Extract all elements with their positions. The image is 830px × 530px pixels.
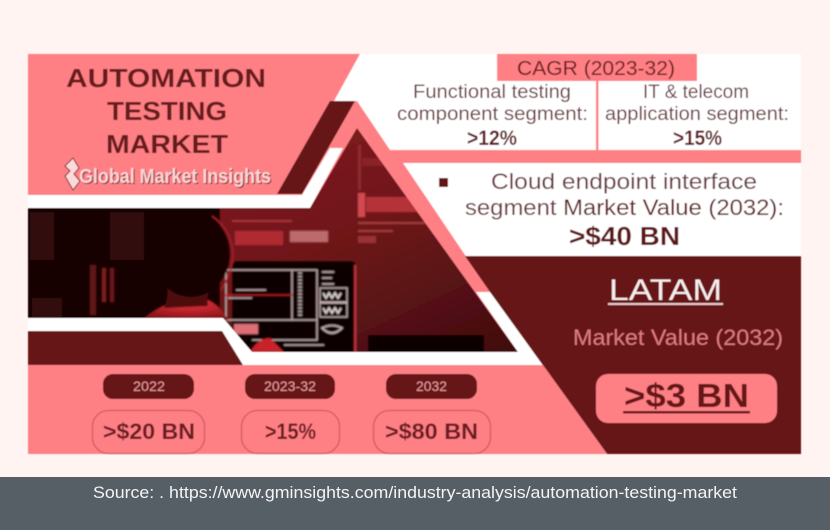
second monitor xyxy=(368,335,484,355)
value outline 2022 xyxy=(92,410,204,454)
logo: Global Market Insights xyxy=(65,158,272,190)
person: right arm xyxy=(250,338,284,352)
year pill 2022 xyxy=(103,374,194,399)
person: headset rim xyxy=(212,216,233,290)
LATAM value: >$3 BN xyxy=(624,377,749,414)
panel: white base xyxy=(28,54,801,454)
value 2023-32: >15% xyxy=(265,419,316,444)
stat: 2032 xyxy=(374,374,490,454)
logo icon xyxy=(65,158,80,190)
heading: title xyxy=(66,63,266,159)
LATAM value box xyxy=(596,374,777,423)
monitor xyxy=(232,261,356,356)
year text 2023-32: 2023-32 xyxy=(264,378,316,394)
CAGR label background xyxy=(497,54,697,81)
title line 2: TESTING xyxy=(107,96,227,126)
title line 3: MARKET xyxy=(106,129,228,159)
market value label: Market Value (2032) xyxy=(573,325,783,350)
year pill 2032 xyxy=(386,374,477,399)
source text: Source: . https://www.gminsights.com/industry-analysis/automation-testing-market xyxy=(93,483,737,502)
LATAM underline xyxy=(608,303,723,305)
value outline 2023-32 xyxy=(242,410,340,454)
divider xyxy=(596,81,598,150)
LATAM value underline xyxy=(623,411,750,414)
component segment text: component segment: xyxy=(397,104,588,125)
year text 2032: 2032 xyxy=(416,378,447,394)
panel: salmon statistics strip xyxy=(28,365,607,454)
application segment text: application segment: xyxy=(605,104,789,125)
panel: cloud endpoint xyxy=(439,169,784,251)
logo text: Global Market Insights xyxy=(79,166,271,188)
dark diagonal stripe xyxy=(277,101,355,194)
photo: developer at monitor xyxy=(20,125,523,356)
dark band: lower left xyxy=(28,331,243,365)
person: shoulders xyxy=(142,299,228,320)
bullet xyxy=(439,178,448,187)
lower screen red block xyxy=(234,324,258,334)
monitor screen lines xyxy=(225,270,347,345)
white stripe: lower xyxy=(28,292,543,365)
infographic artwork xyxy=(20,54,801,454)
value 2022: >$20 BN xyxy=(103,419,195,444)
person: neck xyxy=(164,288,210,309)
cloud text line 1: Cloud endpoint interface xyxy=(491,169,757,194)
LATAM heading: LATAM xyxy=(609,274,722,307)
cloud value: >$40 BN xyxy=(569,221,680,251)
logo text shadow: Global Market Insights xyxy=(80,167,272,189)
panel: CAGR xyxy=(397,54,789,150)
dark room xyxy=(27,208,221,318)
year text 2022: 2022 xyxy=(133,378,165,394)
functional value: >12% xyxy=(467,127,517,150)
title line 1: AUTOMATION xyxy=(66,63,266,93)
stat: 2022 xyxy=(92,374,204,454)
panel: salmon title block and diagonal band xyxy=(28,54,801,352)
photo contents xyxy=(20,125,523,356)
CAGR label: CAGR (2023-32) xyxy=(517,58,675,80)
IT and telecom text: IT & telecom xyxy=(643,82,749,103)
value 2032: >$80 BN xyxy=(385,419,478,444)
stat: 2023-32 xyxy=(242,374,340,454)
panel: LATAM xyxy=(573,274,783,423)
year pill 2023-32 xyxy=(245,374,335,399)
source bar background xyxy=(0,477,830,530)
cloud text line 2: segment Market Value (2032): xyxy=(465,195,784,220)
red code band on the wall xyxy=(232,145,428,245)
IT value: >15% xyxy=(673,127,722,150)
person: head xyxy=(165,226,231,298)
panel: LATAM dark block xyxy=(465,256,801,454)
monitor edge glow xyxy=(354,265,356,353)
photo backdrop xyxy=(218,128,518,353)
white stripe: upper xyxy=(28,148,343,208)
shelves in the room xyxy=(30,212,144,318)
functional testing text: Functional testing xyxy=(413,82,571,103)
value outline 2032 xyxy=(374,410,490,454)
source bar xyxy=(0,477,830,530)
